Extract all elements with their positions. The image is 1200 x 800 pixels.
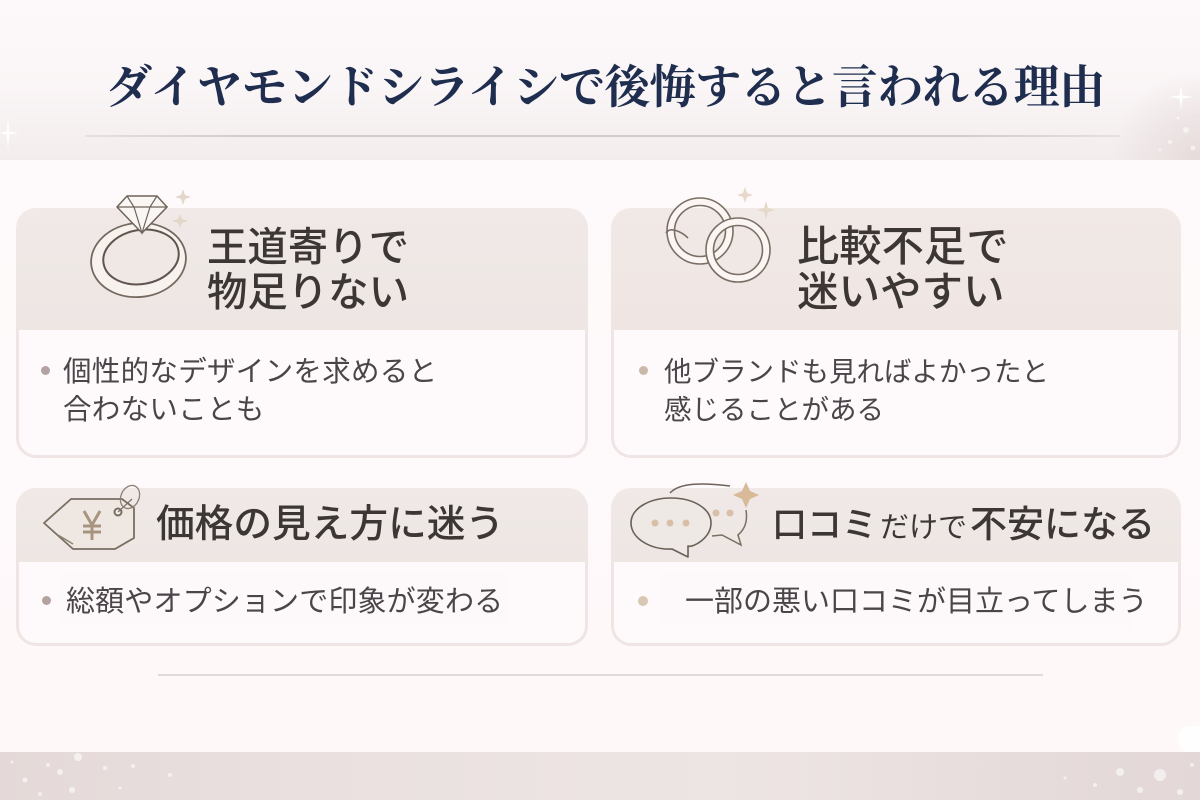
sparkle: top left [2, 120, 17, 146]
heading line 1: 王道寄りで [207, 224, 409, 270]
sparkle: bottom right glow [1178, 726, 1200, 752]
body line 1: 他ブランドも見ればよかったと [664, 356, 1049, 387]
icon: interlocked rings [665, 187, 774, 283]
panel body [611, 330, 1181, 458]
bullet [638, 596, 648, 606]
body line 1: 個性的なデザインを求めると [63, 356, 437, 388]
heading [797, 223, 1008, 315]
body text: 総額やオプションで印象が変わる [66, 586, 503, 618]
panel: 価格の見え方に迷う [16, 484, 588, 646]
panel body [16, 562, 588, 646]
body text: 一部の悪い口コミが目立ってしまう [685, 586, 1148, 618]
panel body [611, 562, 1181, 646]
heading: 口コミだけで不安になる [772, 504, 1155, 545]
body text patch [62, 572, 506, 630]
bullet [639, 366, 648, 375]
heading: 価格の見え方に迷う [156, 503, 504, 546]
icon: speech bubbles [630, 482, 759, 558]
panel header [16, 488, 588, 562]
panel body [16, 330, 588, 458]
panel: 王道寄りで物足りない [16, 190, 588, 458]
heading line 1: 比較不足で [797, 223, 1008, 270]
heading line 2: 物足りない [207, 269, 409, 315]
panel header [611, 488, 1181, 562]
panel: 口コミだけで不安になる [611, 482, 1181, 646]
glitter: top right corner [1149, 88, 1200, 160]
top header band [0, 0, 1200, 160]
panel header [611, 208, 1181, 330]
body line 2: 合わないことも [63, 394, 265, 426]
body text patch [662, 572, 1132, 630]
heading line 2: 迷いやすい [797, 268, 1005, 315]
body text [63, 356, 437, 426]
icon: diamond ring [90, 190, 190, 298]
bottom glitter band [0, 752, 1200, 800]
icon: yen price tag [43, 484, 140, 550]
body line 2: 感じることがある [664, 394, 884, 425]
bullet [42, 596, 51, 605]
panel: 比較不足で迷いやすい [611, 187, 1181, 458]
heading [207, 224, 409, 315]
title: ダイヤモンドシライシで後悔すると言われる理由 [106, 62, 1105, 113]
panel header [16, 208, 588, 330]
body text [664, 356, 1049, 425]
bullet [41, 366, 50, 375]
